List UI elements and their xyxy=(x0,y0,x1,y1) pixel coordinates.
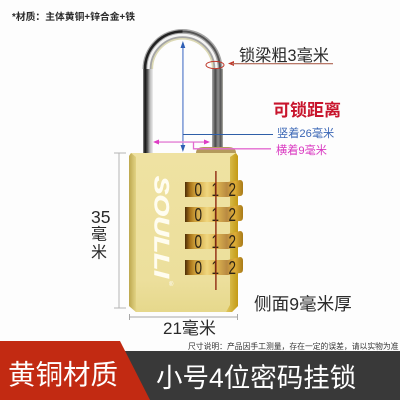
registered mark: ® xyxy=(169,281,174,288)
label: shackle thickness: 锁梁粗3毫米 xyxy=(239,46,329,65)
label: vertical distance: 竖着26毫米 xyxy=(277,126,334,140)
footer bar xyxy=(0,351,400,400)
footer red tag xyxy=(0,341,150,400)
dial row 4: 1 xyxy=(212,258,219,278)
shackle xyxy=(143,32,223,153)
label: height 35 mm xyxy=(91,207,110,262)
footer product name: 小号4位密码挂锁 xyxy=(156,363,356,393)
label: height 35 mm: 毫 xyxy=(91,224,107,244)
arrow: vertical clearance xyxy=(180,41,273,152)
dial row 3: 0 xyxy=(194,232,202,252)
height dimension bracket xyxy=(114,153,126,308)
brand mark: SOULLI xyxy=(150,176,172,280)
label: horizontal distance: 横着9毫米 xyxy=(276,143,327,157)
footer tag text: 黄铜材质 xyxy=(8,359,118,390)
dial index line xyxy=(215,171,217,290)
label: height 35 mm: 35 xyxy=(91,207,110,227)
heading: lockable distance: 可锁距离 xyxy=(273,100,341,120)
dial row 3: 1 xyxy=(212,232,219,252)
padlock illustration xyxy=(129,32,243,312)
size disclaimer: 尺寸说明：产品因手工测量，存在一定的误差，请以实物为准 xyxy=(188,341,399,351)
width dimension bracket xyxy=(130,314,238,320)
dial row 1: 1 xyxy=(212,180,219,200)
dial row 3 xyxy=(185,231,243,252)
dial row 4: 2 xyxy=(228,258,236,278)
dial row 2: 1 xyxy=(212,205,219,225)
dial row 1: 0 xyxy=(194,180,202,200)
dial row 1: 2 xyxy=(228,180,236,200)
material note: *材质：主体黄铜+锌合金+铁 xyxy=(12,10,135,23)
shackle collar xyxy=(196,147,236,153)
dial row 2 xyxy=(185,205,243,225)
dial row 2: 2 xyxy=(228,205,236,225)
dial row 1 xyxy=(185,180,243,200)
label: side thickness: 侧面9毫米厚 xyxy=(254,294,352,314)
lock body xyxy=(129,153,238,312)
dial row 3: 2 xyxy=(228,232,236,252)
shackle thickness marker xyxy=(206,61,333,69)
dial row 4: 0 xyxy=(194,258,202,278)
arrow: horizontal clearance xyxy=(153,140,271,149)
dial row 2: 0 xyxy=(194,205,202,225)
label: height 35 mm: 米 xyxy=(91,244,107,262)
dial row 4 xyxy=(185,257,243,278)
label: width 21 mm: 21毫米 xyxy=(163,319,216,338)
